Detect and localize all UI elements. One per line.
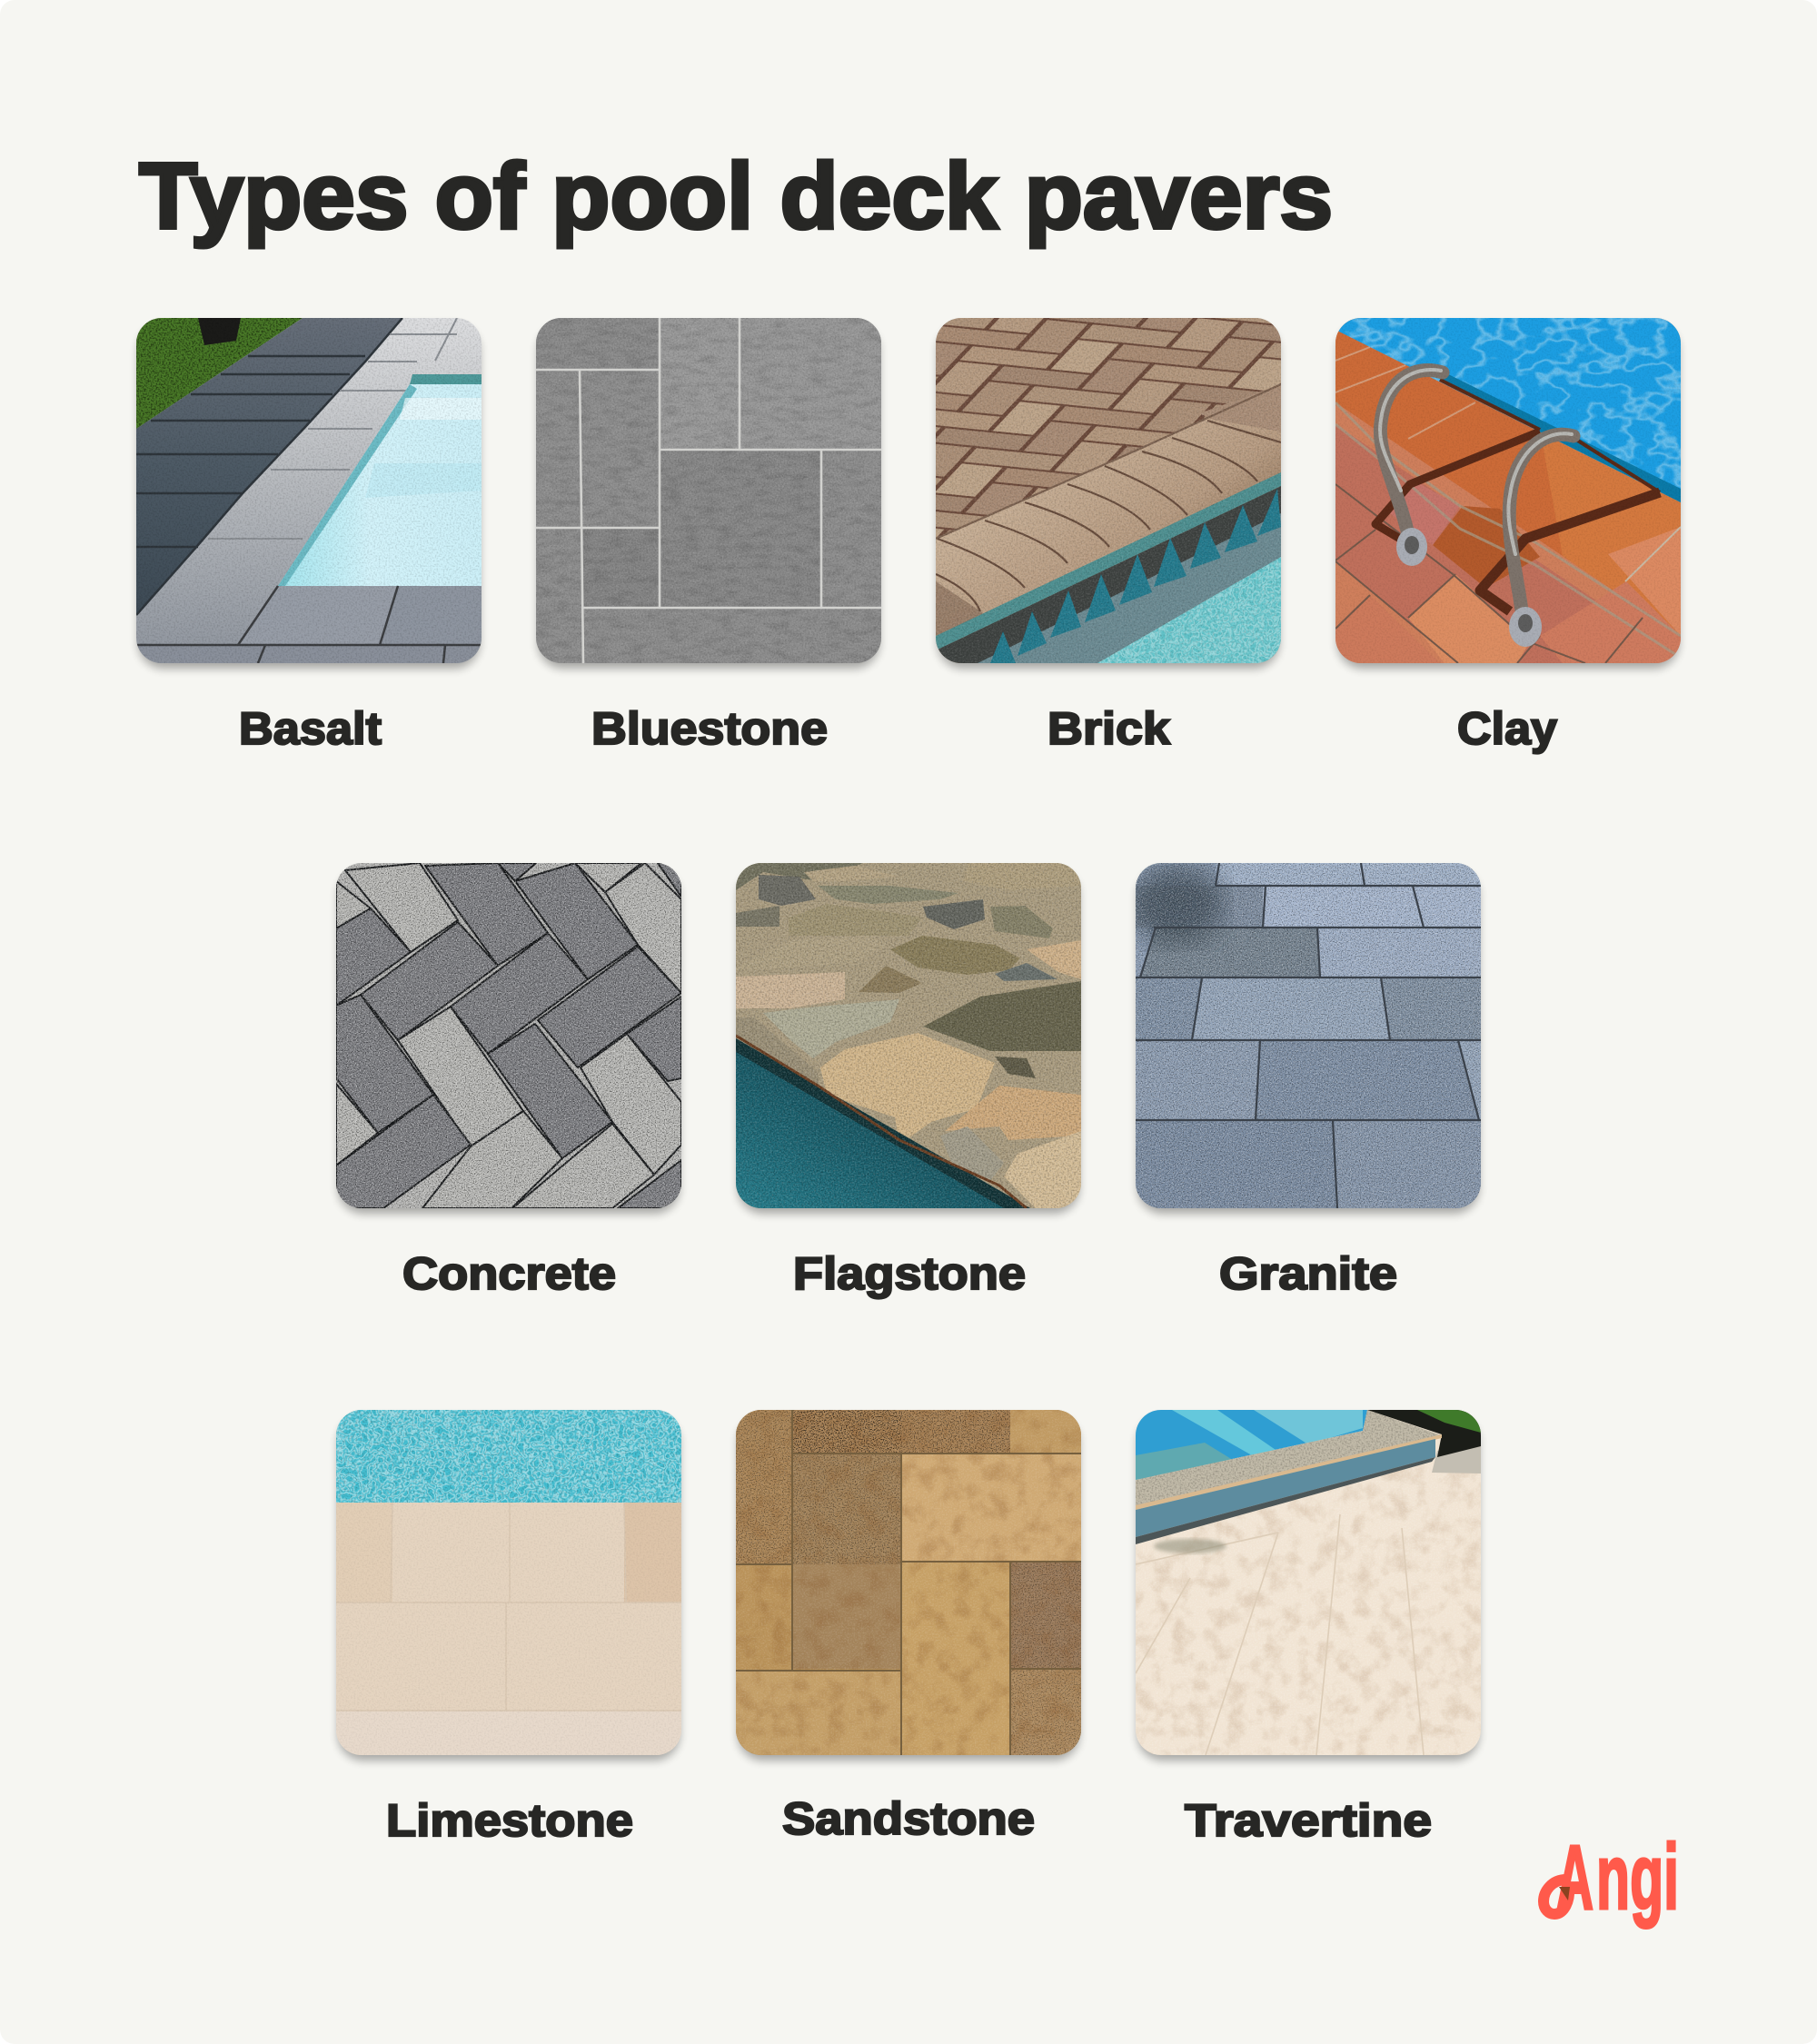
title: Types of pool deck pavers: [139, 144, 1333, 248]
label: concrete: Concrete: [402, 1248, 616, 1299]
panel: bluestone: [536, 318, 881, 754]
photo: flagstone coping above teal pool: [736, 863, 1081, 1214]
label: sandstone: Sandstone: [782, 1793, 1035, 1844]
panel: flagstone: [736, 863, 1081, 1299]
panel: granite: [1129, 863, 1481, 1299]
photo: travertine deck and spa: [1136, 1410, 1481, 1761]
label: travertine: Travertine: [1185, 1795, 1432, 1846]
label: flagstone: Flagstone: [793, 1248, 1026, 1299]
photo: limestone tile beside pool: [336, 1410, 681, 1761]
label: clay: Clay: [1457, 703, 1557, 754]
photo: sandstone pavers: [736, 1410, 1081, 1761]
panel: brick: [936, 318, 1281, 754]
photo: bluestone slabs: [536, 318, 881, 669]
panel: travertine: [1136, 1410, 1481, 1846]
photo: two-tone concrete herringbone pavers: [336, 863, 681, 1214]
photo: clay tile and pool ladder: [1335, 318, 1681, 669]
photo: brick pavers and pool edge: [936, 318, 1281, 669]
label: basalt: Basalt: [239, 703, 382, 754]
panel: sandstone: [736, 1410, 1081, 1844]
label: limestone: Limestone: [386, 1795, 633, 1846]
label: brick: Brick: [1048, 703, 1170, 754]
label: bluestone: Bluestone: [591, 703, 828, 754]
panel: clay: [1335, 318, 1681, 754]
panel: concrete: [336, 863, 681, 1299]
panel: basalt: [136, 318, 482, 754]
photo: blue-gray granite slabs: [1129, 863, 1481, 1214]
label: granite: Granite: [1219, 1248, 1397, 1299]
photo: basalt pavers beside pool: [136, 318, 482, 669]
panel: limestone: [336, 1410, 681, 1846]
logo: Angi: A: [1556, 1827, 1594, 1929]
logo: Angi: [1544, 1825, 1679, 1929]
logo: Angi: ngi: [1596, 1825, 1679, 1929]
